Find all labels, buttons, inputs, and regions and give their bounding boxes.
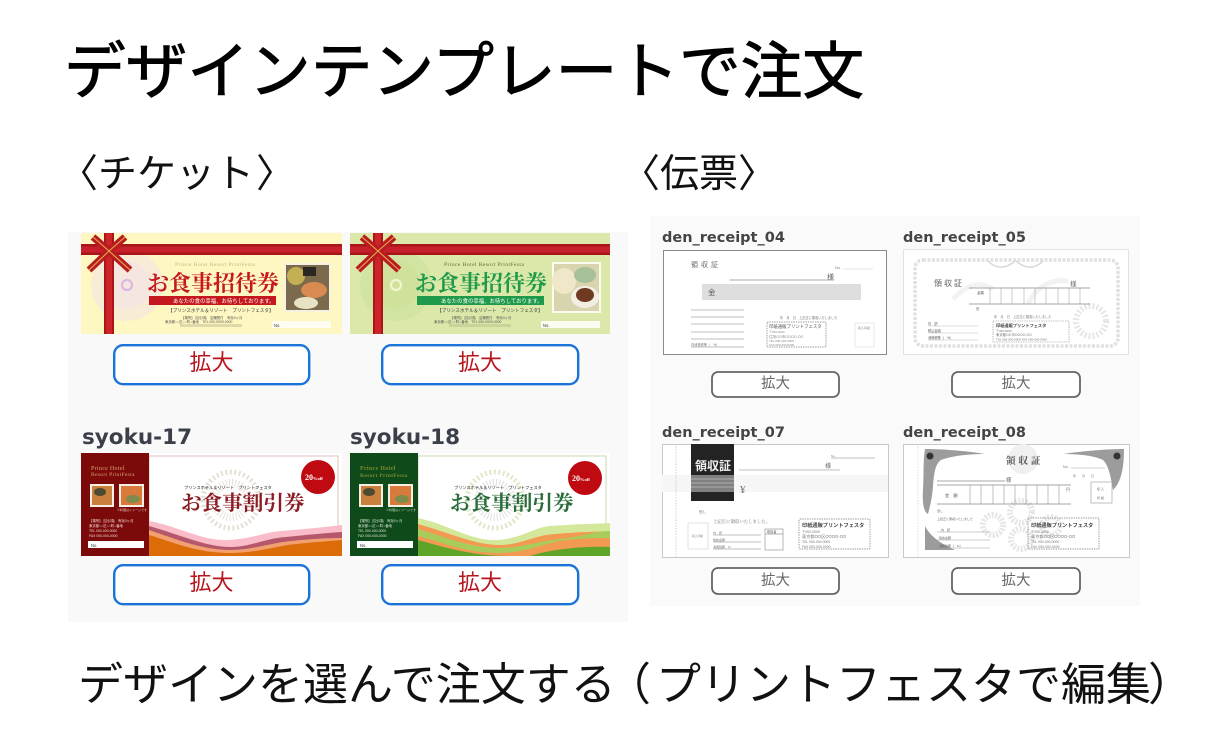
ticket: green invitation: Prince Hotel Resort PrintFesta: [444, 262, 524, 268]
ticket: green invitation: [350, 233, 610, 334]
heading: slips: [621, 153, 777, 196]
slip: den_receipt_08: 印紙通販プリントフェスタ: [1031, 521, 1093, 529]
slip: den_receipt_04: No.: [835, 265, 841, 270]
slip: den_receipt_08: 東京都OO区OOOO-OO: [1031, 533, 1076, 540]
slip: den_receipt_07: 税抜金額: [713, 537, 725, 542]
heading: tickets: チケット: [98, 153, 254, 196]
slip: den_receipt_08: No.: [1063, 465, 1069, 469]
ticket: red discount: ※料理はイメージです: [117, 507, 147, 512]
ticket: red discount: プリンスホテル＆リゾート プリントフェスタ: [184, 484, 272, 491]
slip: den_receipt_04: 領収証: [691, 260, 721, 269]
slip: den_receipt_05: 様: [1070, 279, 1077, 288]
label: den_receipt_07: den_receipt_07: [662, 425, 785, 441]
ticket: red discount: Resort PrintFesta: [91, 472, 135, 478]
slip: den_receipt_04: 収入印紙: [858, 325, 870, 330]
slip: den_receipt_08: 年 月 日: [1073, 473, 1094, 478]
ticket: green discount: 東京都○○区○○町○番地: [358, 523, 393, 528]
ticket: red discount: FAX 000-000-0000: [89, 534, 118, 538]
button: enlarge slip 04: [712, 372, 839, 397]
button: enlarge ticket 2: [382, 345, 578, 384]
ticket: red discount: 東京都○○区○○町○番地: [89, 523, 124, 528]
slip: den_receipt_07: 領収証: [695, 458, 731, 473]
label: den_receipt_04: den_receipt_04: [662, 230, 785, 246]
slip: den_receipt_08: 〒000-0000: [1031, 530, 1049, 534]
ticket: green invitation: 【プリンスホテル＆リゾート プリントフェスタ】: [437, 307, 543, 314]
label: den_receipt_08: den_receipt_08: [903, 425, 1026, 441]
ticket: green invitation: あなたの食の幸福、お待ちしております。: [441, 297, 543, 305]
slip: den_receipt_08: 消費税額（ %）: [939, 543, 963, 548]
slip: den_receipt_04: 年 月 日 上記正に領収いたしました: [780, 315, 837, 320]
ticket: red invitation: [81, 233, 342, 334]
slip: den_receipt_07: TEL 000-000-0000: [802, 540, 830, 544]
slip: den_receipt_05: 〒000-0000: [996, 329, 1012, 333]
slip: den_receipt_07: 但し: [699, 509, 707, 514]
slip: den_receipt_08: 収 入: [1097, 487, 1104, 491]
ticket: green invitation: 東京都○○区○○町○番地 TEL 000-0000-0000: [434, 319, 502, 324]
slip: den_receipt_05: 印紙通販プリントフェスタ: [996, 322, 1046, 329]
button: enlarge slip 07: [712, 568, 839, 594]
heading: slips: 〈: [621, 153, 660, 196]
ticket: red discount: Prince Hotel: [91, 466, 125, 472]
slip: den_receipt_04: [664, 250, 886, 354]
slip: den_receipt_04: 〒000-0000: [769, 330, 785, 334]
ticket: green discount: ※料理はイメージです: [386, 507, 416, 512]
slip: den_receipt_08: 上記正に領収いたしました: [937, 516, 973, 521]
slip: den_receipt_07: 東京都OO区OOOO-OO: [802, 533, 847, 540]
ticket: red discount: 【場所】当社2階 有効3ヶ月: [89, 518, 133, 523]
slip: den_receipt_05: 但: [976, 306, 980, 311]
caption: [78, 659, 1193, 710]
slip: den_receipt_07: 内 訳: [713, 530, 722, 535]
slip: den_receipt_07: 収入印紙: [692, 534, 703, 538]
ticket: red discount: TEL 000-000-0000: [89, 529, 117, 533]
heading: slips: 伝票: [660, 153, 738, 196]
slip: den_receipt_07: ¥: [740, 484, 746, 496]
ticket: green discount: 20%off: [572, 474, 590, 483]
slip: den_receipt_05: TEL 000-000-0000 FAX 000-000-0000: [996, 338, 1047, 342]
ticket: red invitation: あなたの食の幸福、お待ちしております。: [173, 297, 275, 305]
button: enlarge ticket 1: [114, 345, 309, 384]
button: enlarge slip 05: 拡大: [1002, 375, 1030, 392]
ticket: red invitation: Prince Hotel Resort PrintFesta: [175, 262, 255, 268]
slip: den_receipt_04: FAX 000-000-0000: [769, 343, 795, 347]
slip: den_receipt_08: 領収証: [1006, 455, 1044, 467]
panel: slips: [650, 216, 1140, 606]
slip: den_receipt_08: 内 訳: [941, 527, 950, 532]
slip: den_receipt_08: 金 額: [945, 492, 958, 499]
button: enlarge ticket 4: 拡大: [458, 570, 502, 595]
ticket: green discount: No.: [360, 543, 367, 548]
ticket: green discount: Prince Hotel: [360, 466, 396, 472]
caption: （: [606, 659, 651, 710]
button: enlarge ticket 3: [114, 565, 309, 604]
label: syoku-17: syoku-17: [82, 425, 192, 450]
ticket: green discount: FAX 000-000-0000: [358, 534, 387, 538]
button: enlarge slip 05: [952, 372, 1080, 397]
slip: den_receipt_07: No.: [831, 454, 836, 458]
ticket: red invitation: No.: [274, 323, 281, 328]
ticket: red invitation: 東京都○○区○○町○番地 TEL 000-0000-0000: [165, 319, 233, 324]
slip: den_receipt_05: 領収証: [934, 278, 964, 288]
button: enlarge slip 04: 拡大: [761, 375, 790, 392]
slip: den_receipt_08: [904, 444, 1130, 558]
button: enlarge ticket 1: 拡大: [189, 350, 234, 375]
slip: den_receipt_05: 金額: [977, 290, 984, 295]
slip: den_receipt_08: 円: [1066, 487, 1070, 492]
slip: den_receipt_08: TEL 000-000-0000: [1031, 540, 1059, 544]
ticket: green discount: Resort PrintFesta: [360, 473, 408, 479]
slip: den_receipt_07: 取扱者: [767, 529, 777, 534]
slip: den_receipt_08: 但し: [937, 508, 943, 513]
slip: den_receipt_04: 内消費税等（ %）: [691, 342, 719, 347]
slip: den_receipt_05: 東京都OO市OOOO-OO: [996, 332, 1032, 337]
ticket: green discount: TEL 000-000-0000: [358, 529, 386, 533]
slip: den_receipt_08: 様: [1006, 476, 1012, 484]
slip: den_receipt_07: 消費税額 %: [713, 544, 731, 549]
slip: den_receipt_08: 税抜金額: [939, 535, 951, 540]
label: syoku-18: syoku-18: [350, 425, 460, 450]
slip: den_receipt_08: FAX 000-000-0000: [1031, 545, 1060, 549]
slip: den_receipt_08: 印 紙: [1097, 495, 1104, 500]
slip: den_receipt_05: 税込金額: [928, 328, 942, 333]
heading: tickets: [59, 153, 295, 196]
label: den_receipt_05: den_receipt_05: [903, 230, 1026, 246]
heading: slips: 〉: [738, 153, 777, 196]
ticket: green invitation: お食事招待券: [415, 271, 547, 296]
ticket: red invitation: 【プリンスホテル＆リゾート プリントフェスタ】: [168, 307, 274, 314]
slip: den_receipt_07: 〒000-0000: [802, 530, 820, 534]
button: enlarge ticket 3: 拡大: [189, 570, 234, 595]
ticket: green invitation: No.: [543, 323, 550, 328]
caption: ）: [1148, 659, 1193, 710]
slip: den_receipt_04: 金: [708, 287, 716, 297]
caption: プリントフェスタで編集: [656, 659, 1151, 710]
ticket: green invitation: 【場所】当社2階 店舗受付 有効3ヶ月: [450, 315, 511, 320]
button: enlarge ticket 2: 拡大: [458, 350, 502, 375]
slip: den_receipt_04: TEL 000-000-0000: [769, 339, 794, 343]
ticket: red invitation: 【場所】当社2階 店舗受付 有効3ヶ月: [181, 315, 242, 320]
slip: den_receipt_05: [904, 250, 1128, 354]
ticket: green discount: 【場所】当社2階 有効3ヶ月: [358, 518, 402, 523]
button: enlarge ticket 4: [382, 565, 578, 604]
ticket: red discount: [81, 453, 342, 556]
panel: tickets: [68, 232, 628, 622]
slip: den_receipt_07: [662, 444, 888, 558]
ticket: red invitation: お食事招待券: [147, 271, 279, 296]
button: enlarge slip 08: 拡大: [1002, 572, 1030, 589]
ticket: green discount: お食事割引券: [450, 491, 574, 515]
slip: den_receipt_05: 消費税等（ %）: [928, 335, 953, 340]
heading: tickets: 〈: [59, 153, 98, 196]
title: デザインテンプレートで注文: [64, 38, 864, 107]
ticket: red discount: No.: [91, 543, 98, 548]
ticket: red discount: お食事割引券: [181, 491, 305, 515]
button: enlarge slip 08: [952, 568, 1080, 594]
slip: den_receipt_05: 年 月 日 上記正に領収いたしました: [994, 314, 1051, 319]
ticket: red discount: 20%off: [305, 473, 323, 482]
slip: den_receipt_05: 内 訳: [928, 321, 938, 326]
slip: den_receipt_04: 印紙通販プリントフェスタ: [769, 323, 822, 330]
button: enlarge slip 07: 拡大: [761, 572, 790, 589]
ticket: green discount: [350, 453, 610, 556]
slip: den_receipt_07: 様: [825, 462, 831, 470]
caption: デザインを選んで注文する: [78, 659, 616, 710]
slip: den_receipt_07: FAX 000-000-0000: [802, 545, 831, 549]
slip: den_receipt_04: 住所OO市OOOO-OO: [769, 334, 804, 339]
slip: den_receipt_04: 様: [827, 272, 834, 281]
slip: den_receipt_07: 印紙通販プリントフェスタ: [802, 521, 864, 529]
slip: den_receipt_07: 上記正に領収いたしました。: [713, 518, 770, 525]
heading: tickets: 〉: [256, 153, 295, 196]
ticket: green discount: プリンスホテル＆リゾート プリントフェスタ: [454, 484, 542, 491]
